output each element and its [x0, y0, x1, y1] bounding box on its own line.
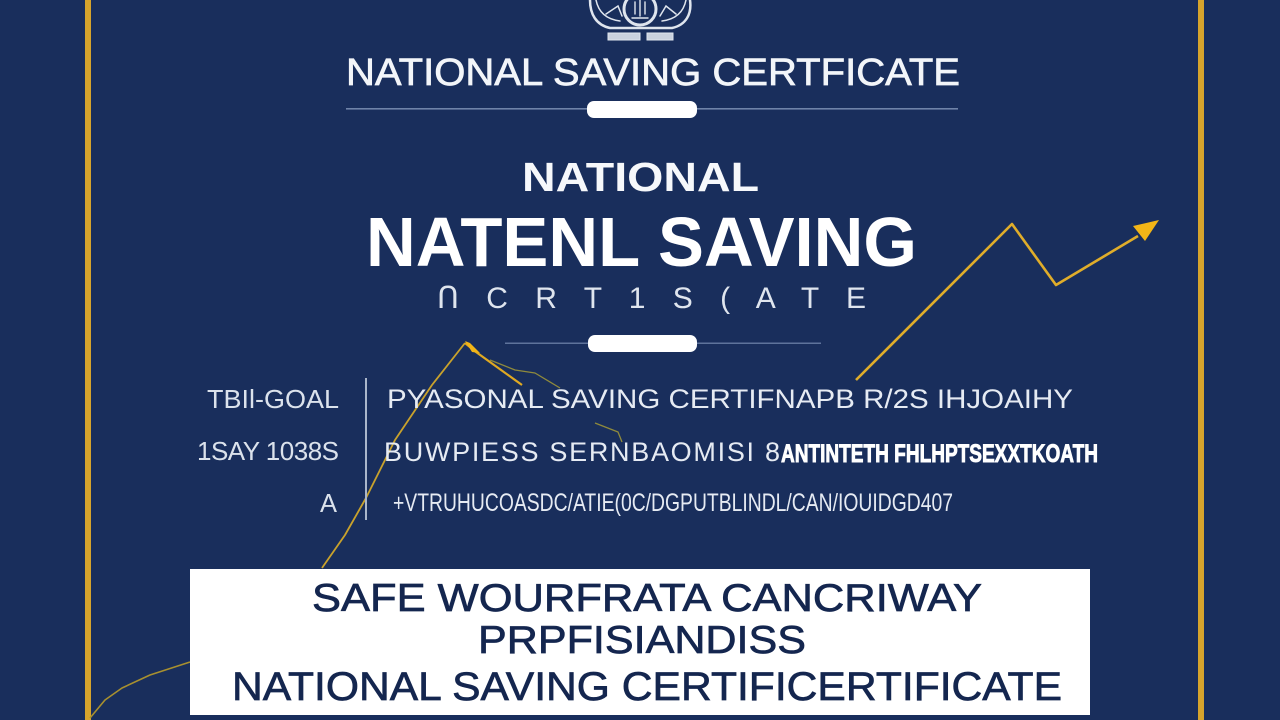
top heading: NATIONAL SAVING CERTFICATE — [346, 52, 960, 94]
detail: row one: PYASONAL SAVING CERTIFNAPB R/2S IHJOAIHY — [387, 384, 1073, 414]
label column — [197, 384, 339, 518]
main title: second line: NATENL SAVING — [366, 203, 917, 281]
detail: row three: +VTRUHUCOASDC/ATIE(0C/DGPUTBLINDL/CAN/IOUIDGD407 — [393, 489, 953, 517]
details column — [384, 384, 1098, 517]
growth line: left — [90, 341, 622, 718]
label: row three: A — [320, 488, 338, 518]
main title: spaced subtitle: ꓵ C R T 1 S ( A T E — [437, 282, 866, 315]
growth arrow line: right — [856, 220, 1159, 380]
label: row one: TBIl-GOAL — [207, 384, 339, 414]
label: row two: 1SAY 1038S — [197, 436, 339, 466]
callout line two: PRPFISIANDISS — [478, 619, 806, 662]
left gold border — [85, 0, 91, 720]
icon: national emblem — [590, 0, 690, 40]
detail: row two dense block: ANTINTETH FHLHPTSEXXTKOATH — [781, 440, 1098, 468]
middle divider with pill — [505, 335, 821, 352]
icon: arrow head — [1133, 220, 1159, 241]
vertical divider — [365, 378, 367, 520]
detail: row two: BUWPIESS SERNBAOMISI 8 — [384, 437, 780, 467]
right gold border — [1198, 0, 1204, 720]
top divider with pill — [346, 101, 958, 118]
callout line three: NATIONAL SAVING CERTIFICERTIFICATE — [232, 665, 1062, 709]
panel: white callout — [190, 569, 1090, 715]
callout line one: SAFE WOURFRATA CANCRIWAY — [312, 577, 982, 620]
main title: first line: NATIONAL — [522, 154, 759, 200]
